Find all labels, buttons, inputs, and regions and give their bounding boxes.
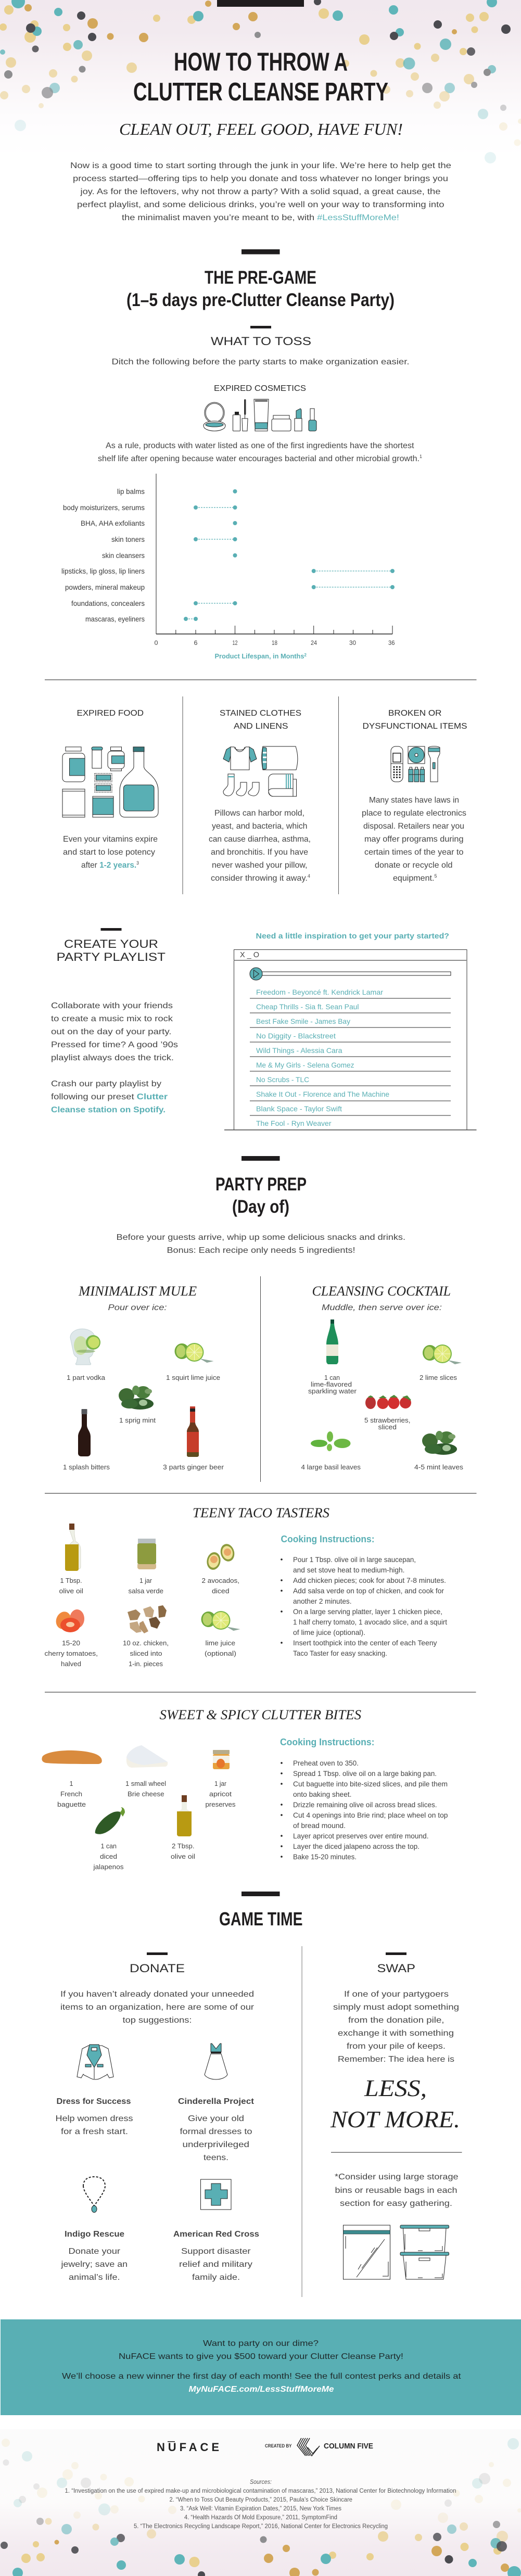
ingredient: baguette: French xyxy=(60,1790,82,1798)
what to toss intro: Ditch the following before the party starts to make organization easier. xyxy=(111,358,409,366)
ingredient: olive oil: 1 Tbsp. xyxy=(60,1577,82,1584)
item: cinderella project: Give your old xyxy=(188,2114,244,2123)
ingredient: lime juice: lime juice xyxy=(205,1639,235,1647)
chart axes xyxy=(156,474,392,634)
cooking instructions list: Spread 1 Tbsp. olive oil on a large baking pan. xyxy=(293,1769,437,1778)
heading: STAINED CLOTHES xyxy=(220,709,301,718)
sources: 2. “When to Toss Out Beauty Products,” 2015, Paula’s Choice Skincare xyxy=(170,2497,352,2503)
ingredient: jalapenos: 1 can xyxy=(101,1842,117,1850)
row labels: BHA, AHA exfoliants xyxy=(81,519,145,527)
song list xyxy=(250,988,451,1127)
swap text: If one of your partygoers xyxy=(344,1990,449,1999)
icon: electronics xyxy=(391,746,440,782)
cooking instructions heading: Cooking Instructions: xyxy=(281,1534,375,1544)
body text: equipment. xyxy=(393,874,434,883)
body text: following our preset Clutter xyxy=(51,1093,168,1101)
heading xyxy=(220,709,301,731)
panel: music player xyxy=(224,949,477,1131)
swap text: from the donation pile, xyxy=(348,2016,444,2025)
item: dress for success xyxy=(55,2045,133,2136)
title: HOW TO THROW A xyxy=(174,48,348,76)
note: *Consider using large storage xyxy=(335,2173,459,2181)
heading: the pre-game: (1–5 days pre-Clutter Cleanse Party) xyxy=(126,290,395,310)
note: bins or reusable bags in each xyxy=(335,2186,457,2195)
cooking instructions list: Add chicken pieces; cook for about 7-8 minutes. xyxy=(293,1576,446,1584)
intro paragraph: the minimalist maven you’re meant to be, with #LessStuffMoreMe! xyxy=(122,213,399,222)
swap text: simply must adopt something xyxy=(333,2003,459,2012)
small bar xyxy=(386,1952,406,1955)
body text: 3 xyxy=(136,860,139,866)
body text xyxy=(362,796,466,883)
body text: Cleanse station on Spotify. xyxy=(51,1106,166,1114)
ingredient: baguette: baguette xyxy=(57,1800,86,1808)
ingredient: lime slices: 2 lime slices xyxy=(420,1374,458,1381)
ingredient: olive oil: olive oil xyxy=(59,1587,83,1595)
swap text: Remember: The idea here is xyxy=(338,2055,454,2064)
note: section for easy gathering. xyxy=(340,2199,452,2208)
banner text: NuFACE wants to give you $500 toward your Clutter Cleanse Party! xyxy=(119,2352,403,2361)
logo: created by column five: CREATED BY xyxy=(265,2443,292,2449)
ingredient: vodka: 1 part vodka xyxy=(67,1374,106,1381)
item: cinderella project: teens. xyxy=(204,2153,228,2162)
ingredient: ginger beer: 3 parts ginger beer xyxy=(163,1463,224,1471)
sources: 5. “The Electronics Recycling Landscape Report,” 2016, National Center for Electronics Recycling xyxy=(134,2523,388,2530)
ingredient: strawberries: sliced xyxy=(378,1423,397,1431)
icon: cosmetics xyxy=(204,399,316,431)
ingredient: cherry tomatoes xyxy=(45,1609,98,1668)
cooking instructions list: of bread mound. xyxy=(293,1821,346,1830)
item: cinderella project: underprivileged xyxy=(182,2140,249,2149)
window controls: X _ O xyxy=(240,950,259,959)
intro paragraph: joy. As for the leftovers, why not throw a party? With a solid squad, a great cause, the xyxy=(80,187,441,196)
axis title: 2 xyxy=(304,653,307,657)
song list: Freedom - Beyoncé ft. Kendrick Lamar xyxy=(256,988,383,996)
callout: less, not more: NOT MORE. xyxy=(330,2106,460,2133)
body text: 4 xyxy=(308,873,310,879)
ingredient: basil xyxy=(301,1431,361,1471)
row labels: skin cleansers xyxy=(102,551,145,560)
intro text: If you haven’t already donated your unneeded xyxy=(60,1990,254,1999)
cosmetics text xyxy=(98,441,422,463)
logo: created by column five: COLUMN FIVE xyxy=(324,2442,373,2451)
cooking instructions list: Cut 4 openings into Brie rind; place wheel on top xyxy=(293,1811,448,1819)
body text: never washed your pillow, xyxy=(212,861,307,870)
item: indigo rescue: Donate your xyxy=(69,2247,121,2256)
row labels: skin toners xyxy=(111,535,145,543)
item: american red cross: relief and military xyxy=(179,2260,252,2269)
ingredient: strawberries xyxy=(364,1395,411,1431)
swap text xyxy=(333,1990,459,2064)
axis labels: 0 xyxy=(154,639,158,646)
body text: after 1-2 years. xyxy=(81,861,138,870)
header background xyxy=(0,0,521,156)
row labels: lipsticks, lip gloss, lip liners xyxy=(61,567,145,575)
song list: Blank Space - Taylor Swift xyxy=(256,1105,342,1113)
intro paragraph: process started—offering tips to help you donate and toss whatever no longer brings you xyxy=(73,174,448,183)
cooking instructions list: 1 half cherry tomato, 1 avocado slice, and a squirt xyxy=(293,1618,447,1626)
heading: DONATE xyxy=(130,1962,185,1975)
panel: donate xyxy=(55,1952,259,2282)
ingredient: bitters: 1 splash bitters xyxy=(63,1463,110,1471)
intro paragraph xyxy=(70,161,451,222)
item: cinderella project: Cinderella Project xyxy=(178,2097,255,2106)
axis labels: 12 xyxy=(232,639,238,646)
body text: Even your vitamins expire xyxy=(63,835,158,844)
row labels: foundations, concealers xyxy=(71,599,145,607)
song list: Best Fake Smile - James Bay xyxy=(256,1017,350,1025)
ingredient: sparkling water: 1 can xyxy=(324,1374,340,1381)
heading: MINIMALIST MULE xyxy=(78,1284,197,1299)
panel: teeny taco tasters xyxy=(45,1505,447,1668)
sources: 4. “Health Hazards Of Mold Exposure,” 2011, SymptomFind xyxy=(184,2515,337,2521)
ingredient: basil: 4 large basil leaves xyxy=(301,1463,361,1471)
cooking instructions list: Preheat oven to 350. xyxy=(293,1759,359,1767)
icon: column five mark xyxy=(297,2438,320,2456)
ingredient: mint leaves: 4-5 mint leaves xyxy=(414,1463,464,1471)
body text: may offer programs during xyxy=(364,835,463,844)
sources: Sources: xyxy=(250,2479,272,2485)
chart: product lifespan xyxy=(61,474,395,660)
data ranges xyxy=(184,489,395,621)
swap text: exchange it with something xyxy=(338,2029,454,2038)
ingredient: brie xyxy=(125,1745,168,1798)
ingredient: mint leaves xyxy=(414,1431,464,1471)
body text: Pillows can harbor mold, xyxy=(214,809,304,818)
cooking instructions list: of lime juice (optional). xyxy=(293,1628,365,1636)
ingredient: lime juice xyxy=(201,1611,240,1657)
ingredient: apricot preserves: 1 jar xyxy=(214,1780,227,1787)
heading: CLEANSING COCKTAIL xyxy=(312,1284,451,1299)
song list: No Diggity - Blackstreet xyxy=(256,1032,336,1040)
subheading: Pour over ice: xyxy=(108,1303,167,1312)
sources: 1. “Investigation on the use of expired make-up and microbiological contamination of mascaras,” 2013, National Center for Biotechnology Information xyxy=(65,2488,456,2494)
song list: Shake It Out - Florence and The Machine xyxy=(256,1090,389,1098)
section bar xyxy=(242,249,280,254)
rule xyxy=(331,2152,462,2153)
note xyxy=(335,2173,459,2208)
callout: less, not more: LESS, xyxy=(364,2075,427,2101)
item: dress for success: Help women dress xyxy=(55,2114,133,2123)
ingredient: jalapenos: jalapenos xyxy=(93,1863,124,1871)
ingredient: chicken: 1-in. pieces xyxy=(129,1660,163,1668)
body text: place to regulate electronics xyxy=(362,809,466,818)
ingredient: cherry tomatoes: 15-20 xyxy=(62,1639,80,1647)
item: indigo rescue: jewelry; save an xyxy=(60,2260,128,2269)
column dividers xyxy=(183,696,338,894)
ingredient: lime juice: 1 squirt lime juice xyxy=(166,1374,220,1381)
item: american red cross: family aide. xyxy=(192,2273,240,2282)
logo: created by column five xyxy=(265,2438,373,2456)
cooking instructions list: and set stove heat to medium-high. xyxy=(293,1566,405,1574)
song list: Wild Things - Alessia Cara xyxy=(256,1046,342,1055)
axis labels: 18 xyxy=(272,639,277,646)
playlist heading: Need a little inspiration to get your party started? xyxy=(256,932,449,941)
body text: Pressed for time? A good ’90s xyxy=(51,1040,178,1049)
cooking instructions list: Bake 15-20 minutes. xyxy=(293,1852,357,1861)
subheading: Muddle, then serve over ice: xyxy=(322,1303,442,1312)
panel: create your party playlist xyxy=(51,928,178,1114)
section bar xyxy=(242,1156,280,1161)
intro text: items to an organization, here are some of our xyxy=(60,2003,255,2012)
panel: sweet and spicy clutter bites xyxy=(42,1707,448,1871)
ingredient: mint xyxy=(119,1386,156,1424)
ingredient: avocados: diced xyxy=(212,1587,229,1595)
ingredient: strawberries: 5 strawberries, xyxy=(364,1416,410,1424)
cooking instructions list: onto baking sheet. xyxy=(293,1790,352,1798)
axis title: Product Lifespan, in Months xyxy=(214,653,302,660)
cooking instructions list: Taco Taster for easy snacking. xyxy=(293,1649,387,1657)
body text xyxy=(209,809,311,883)
row labels: mascaras, eyeliners xyxy=(85,615,145,623)
ingredient: avocados xyxy=(202,1542,239,1595)
ingredient: apricot preserves: preserves xyxy=(205,1800,236,1808)
top bar xyxy=(217,0,304,7)
item: indigo rescue xyxy=(60,2177,128,2282)
panel: minimalist mule xyxy=(63,1284,224,1471)
cooking instructions list: Insert toothpick into the center of each Teeny xyxy=(293,1639,437,1647)
cooking instructions list: Layer the diced jalapeno across the top. xyxy=(293,1842,420,1850)
heading: party prep: PARTY PREP xyxy=(215,1174,307,1195)
item: dress for success: Dress for Success xyxy=(56,2097,131,2106)
body text: out on the day of your party. xyxy=(51,1027,172,1036)
song list: No Scrubs - TLC xyxy=(256,1075,309,1084)
banner text: We’ll choose a new winner the first day of each month! See the full contest perks and details at xyxy=(62,2372,461,2381)
party prep intro xyxy=(117,1233,405,1255)
cooking instructions list: On a large serving platter, layer 1 chicken piece, xyxy=(293,1607,442,1616)
ingredient: olive oil xyxy=(171,1795,195,1860)
cooking instructions list xyxy=(281,1555,447,1657)
title: CLUTTER CLEANSE PARTY xyxy=(133,78,388,106)
heading: SWEET & SPICY CLUTTER BITES xyxy=(159,1707,361,1722)
cooking instructions list: Drizzle remaining olive oil across bread slices. xyxy=(293,1800,437,1809)
axis labels: 24 xyxy=(311,639,317,646)
intro paragraph: Now is a good time to start sorting through the junk in your life. We’re here to help get the xyxy=(70,161,451,170)
body text: can cause diarrhea, asthma, xyxy=(209,835,311,844)
panel: swap xyxy=(330,1952,462,2279)
panel: contest banner xyxy=(1,2319,521,2415)
heading: PARTY PLAYLIST xyxy=(56,950,166,963)
ingredient: cherry tomatoes: halved xyxy=(61,1660,81,1668)
small bar xyxy=(101,928,122,931)
ingredient: sparkling water: lime-flavored xyxy=(311,1380,352,1388)
ingredient: baguette: 1 xyxy=(70,1780,73,1787)
row labels: body moisturizers, serums xyxy=(63,503,145,512)
body text: Many states have laws in xyxy=(369,796,459,805)
cosmetics text: shelf life after opening because water encourages bacterial and other microbial growth. xyxy=(98,454,418,463)
heading: DYSFUNCTIONAL ITEMS xyxy=(362,722,467,731)
title xyxy=(133,48,388,106)
song list: Cheap Thrills - Sia ft. Sean Paul xyxy=(256,1003,359,1011)
logo: nuface: NUFACE xyxy=(157,2441,219,2454)
item: dress for success: for a fresh start. xyxy=(61,2127,128,2136)
ingredient: jalapenos: diced xyxy=(100,1852,117,1860)
body text: to create a music mix to rock xyxy=(51,1014,173,1023)
item: cinderella project: formal dresses to xyxy=(180,2127,252,2136)
ingredient: vodka xyxy=(67,1329,106,1381)
ingredient: olive oil xyxy=(59,1524,83,1595)
ingredient: chicken: sliced into xyxy=(130,1649,162,1657)
ingredient: apricot preserves xyxy=(205,1750,236,1808)
ingredient: baguette xyxy=(42,1750,102,1808)
heading: the pre-game: THE PRE-GAME xyxy=(205,268,316,288)
body text: yeast, and bacteria, which xyxy=(212,822,307,831)
banner text: Want to party on our dime? xyxy=(203,2339,319,2348)
axis labels: 30 xyxy=(349,639,356,646)
heading: what to toss: WHAT TO TOSS xyxy=(211,335,311,348)
body text: disposal. Retailers near you xyxy=(363,822,464,831)
item: indigo rescue: animal’s life. xyxy=(69,2273,120,2282)
row labels xyxy=(61,487,145,623)
panel: expired food xyxy=(62,709,158,870)
heading: CREATE YOUR xyxy=(64,937,158,950)
small bar xyxy=(250,326,271,328)
body text: Collaborate with your friends xyxy=(51,1001,173,1010)
progress bar xyxy=(250,968,451,980)
body text: playlist always does the trick. xyxy=(51,1054,174,1062)
row labels: powders, mineral makeup xyxy=(65,583,145,591)
body text: Crash our party playlist by xyxy=(51,1080,161,1088)
rule xyxy=(45,1493,477,1494)
ingredient: brie: Brie cheese xyxy=(128,1790,164,1798)
intro paragraph: perfect playlist, and some delicious drinks, you’re well on your way to transforming into xyxy=(77,200,444,209)
panel: broken or dysfunctional items xyxy=(362,709,467,883)
item: american red cross: American Red Cross xyxy=(173,2230,259,2239)
body text xyxy=(63,835,158,870)
cooking instructions list: Pour 1 Tbsp. olive oil in large saucepan, xyxy=(293,1555,416,1564)
heading: BROKEN OR xyxy=(388,709,441,718)
ingredient: lime slices xyxy=(420,1344,462,1381)
callout: less, not more xyxy=(330,2075,460,2133)
cosmetics text: 1 xyxy=(420,454,422,459)
small bar xyxy=(147,1952,168,1955)
song list: The Fool - Ryn Weaver xyxy=(256,1119,332,1127)
ingredient: salsa verde xyxy=(128,1539,163,1595)
cooking instructions list: Layer apricot preserves over entire mound. xyxy=(293,1832,429,1840)
sources: 3. “Ask Well: Vitamin Expiration Dates,” 2015, New York Times xyxy=(180,2506,341,2512)
heading: SWAP xyxy=(377,1962,415,1975)
item: indigo rescue: Indigo Rescue xyxy=(65,2230,124,2239)
heading: EXPIRED FOOD xyxy=(77,709,144,718)
heading: party prep: (Day of) xyxy=(232,1197,289,1217)
axis labels: 6 xyxy=(194,639,198,646)
ingredient: avocados: 2 avocados, xyxy=(202,1577,239,1584)
ingredient: cherry tomatoes: cherry tomatoes, xyxy=(45,1649,98,1657)
ingredient: ginger beer xyxy=(163,1406,224,1471)
song list: Me & My Girls - Selena Gomez xyxy=(256,1061,354,1069)
item: american red cross: Support disaster xyxy=(181,2247,251,2256)
heading: TEENY TACO TASTERS xyxy=(193,1505,329,1520)
ingredient: jalapenos xyxy=(93,1807,125,1871)
icon: clothes and linens xyxy=(223,746,298,796)
ingredient: chicken xyxy=(123,1605,169,1668)
panel: cleansing cocktail xyxy=(301,1284,464,1471)
ingredient: lime juice: (optional) xyxy=(205,1649,236,1657)
ingredient: sparkling water: sparkling water xyxy=(308,1387,357,1395)
heading: the pre-game xyxy=(126,268,395,310)
row labels: lip balms xyxy=(117,487,145,496)
heading: AND LINENS xyxy=(234,722,288,731)
icon: bag and bins xyxy=(344,2225,449,2279)
cooking instructions list: Cut baguette into bite-sized slices, and pile them xyxy=(293,1780,448,1788)
party prep intro: Before your guests arrive, whip up some delicious snacks and drinks. xyxy=(117,1233,405,1242)
intro text xyxy=(60,1990,255,2025)
body text: certain times of the year to xyxy=(364,848,464,857)
ingredient: bitters xyxy=(63,1409,110,1471)
rule xyxy=(45,1692,476,1693)
heading xyxy=(56,937,166,963)
cooking instructions list: another 2 minutes. xyxy=(293,1597,352,1605)
axis labels xyxy=(154,639,395,646)
ingredient: olive oil: 2 Tbsp. xyxy=(172,1842,195,1850)
cooking instructions heading: Cooking Instructions: xyxy=(280,1737,375,1747)
icon: food jars xyxy=(62,747,158,817)
ingredient: salsa verde: salsa verde xyxy=(128,1587,163,1595)
heading: game time: GAME TIME xyxy=(219,1908,303,1930)
confetti: top xyxy=(0,0,521,163)
sources xyxy=(65,2479,456,2530)
footer background xyxy=(0,2429,521,2576)
ingredient: brie: 1 small wheel xyxy=(125,1780,166,1787)
tagline: CLEAN OUT, FEEL GOOD, HAVE FUN! xyxy=(119,120,403,138)
divider xyxy=(260,1276,261,1482)
heading: party prep xyxy=(215,1174,307,1217)
axis labels: 36 xyxy=(388,639,395,646)
ingredient: sparkling water xyxy=(308,1319,357,1395)
ingredient: apricot preserves: apricot xyxy=(209,1790,232,1798)
rule xyxy=(45,679,477,680)
banner link: MyNuFACE.com/LessStuffMoreMe xyxy=(188,2385,334,2394)
banner text xyxy=(62,2339,461,2381)
item: american red cross xyxy=(173,2179,259,2282)
cooking instructions list xyxy=(281,1759,448,1861)
section bar xyxy=(242,1892,280,1896)
confetti: bottom xyxy=(1,2438,521,2576)
party prep intro: Bonus: Each recipe only needs 5 ingredients! xyxy=(167,1246,355,1255)
cooking instructions list: Add salsa verde on top of chicken, and cook for xyxy=(293,1587,444,1595)
body text: consider throwing it away. xyxy=(211,874,306,883)
body text: donate or recycle old xyxy=(375,861,453,870)
cosmetics text: As a rule, products with water listed as one of the first ingredients have the shortest xyxy=(106,441,414,450)
ingredient: olive oil: olive oil xyxy=(171,1852,195,1860)
body text: 5 xyxy=(434,873,437,879)
ingredient: salsa verde: 1 jar xyxy=(139,1577,153,1584)
ingredient: mint: 1 sprig mint xyxy=(119,1416,156,1424)
heading: expired cosmetics: EXPIRED COSMETICS xyxy=(214,384,306,393)
ingredient: chicken: 10 oz. chicken, xyxy=(123,1639,169,1647)
item: cinderella project xyxy=(178,2044,255,2162)
heading xyxy=(362,709,467,731)
panel: stained clothes and linens xyxy=(209,709,311,883)
intro text: top suggestions: xyxy=(123,2016,192,2025)
body text: and start to lose potency xyxy=(63,848,155,857)
swap text: from your pile of keeps. xyxy=(347,2042,446,2051)
body text xyxy=(51,1001,178,1114)
body text: and bronchitis. If you have xyxy=(211,848,308,857)
ingredient: lime juice xyxy=(166,1343,220,1381)
